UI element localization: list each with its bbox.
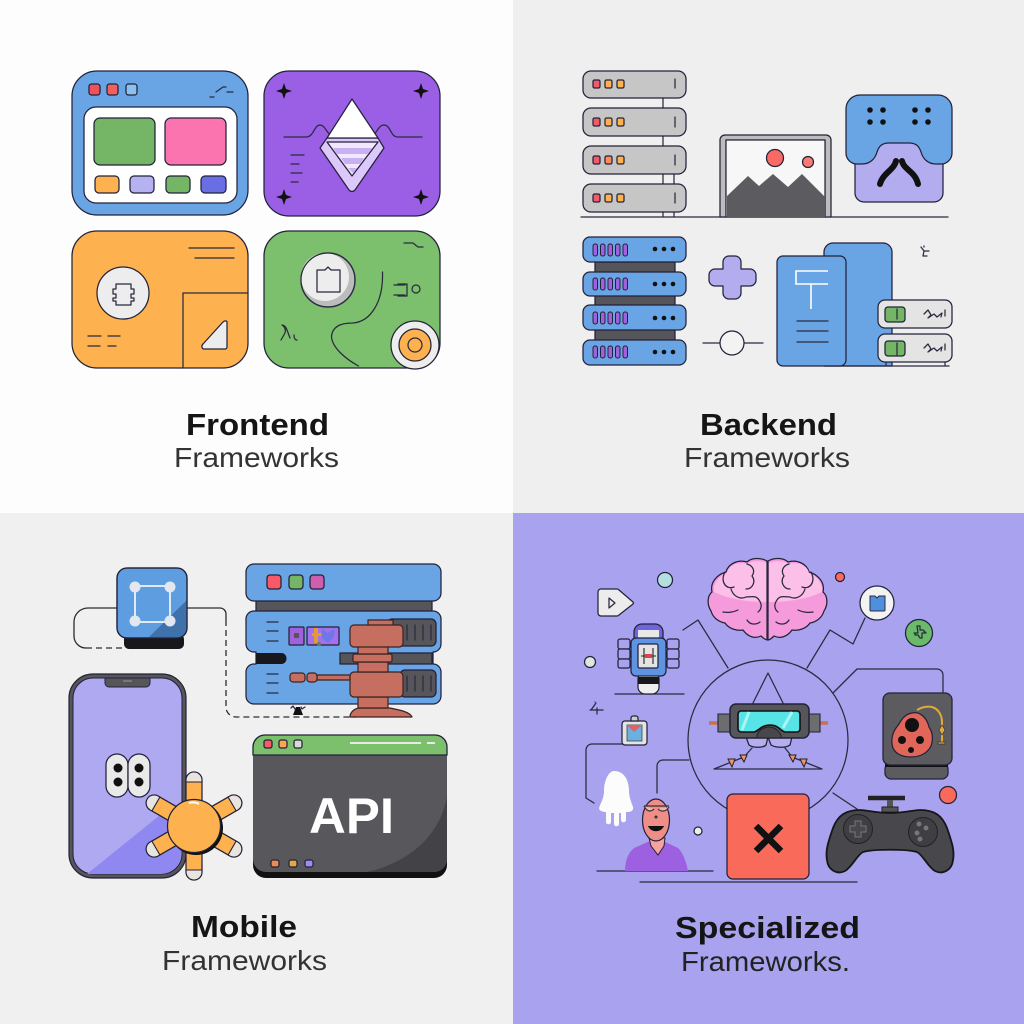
card: purple diamond (264, 71, 440, 216)
blue server rack (583, 237, 686, 365)
icon: tiny glyph (921, 246, 929, 256)
icon: play tag (598, 589, 633, 616)
icon: red X card (727, 794, 809, 879)
large circle (688, 660, 848, 820)
subheading: backend: Frameworks (684, 442, 850, 473)
icon: bomb device (883, 693, 952, 779)
heading: mobile: Mobile (191, 909, 297, 944)
icon: brain (708, 558, 827, 640)
heading: frontend: Frontend (186, 407, 329, 442)
phone (69, 674, 186, 878)
small black figure (291, 706, 305, 715)
small switches (878, 300, 952, 362)
heading: specialized: Specialized (675, 910, 860, 945)
panel: backend (581, 71, 952, 473)
heading: backend: Backend (700, 407, 837, 442)
icon: envelope tag (622, 716, 647, 745)
label: API: API (309, 788, 394, 844)
icon: robot (615, 624, 684, 694)
icon: folder badge (860, 586, 894, 620)
grey server rack (583, 71, 686, 212)
server stack (246, 564, 441, 704)
panel: specialized (584, 558, 956, 977)
subheading: mobile: Frameworks (162, 945, 327, 976)
lavender plus (709, 256, 756, 299)
icon: small cross glyph (590, 702, 603, 714)
circle node (703, 331, 763, 355)
dots and badges (584, 572, 956, 835)
subheading: frontend: Frameworks (174, 442, 339, 473)
connector lines (74, 608, 356, 717)
card: browser window (72, 71, 248, 215)
blue socket box (846, 95, 952, 202)
subheading: specialized: Frameworks. (681, 946, 850, 977)
icon: VR headset (709, 673, 828, 769)
icon: person (625, 799, 688, 871)
card: green tile (264, 231, 440, 369)
icon: game controller (826, 798, 954, 872)
icon: orange gear (143, 772, 245, 880)
card: orange tile (72, 231, 248, 368)
connecting lines (586, 618, 943, 882)
red gavel machine (290, 620, 412, 717)
document stack (777, 243, 892, 366)
panel: mobile (69, 564, 447, 976)
floor line (581, 216, 948, 218)
API window (253, 735, 447, 878)
icon: vector square (117, 568, 187, 649)
picture frame (720, 135, 831, 217)
icon: ghost (599, 771, 633, 826)
icon: green plus badge (906, 620, 932, 646)
panel: frontend (72, 71, 440, 473)
